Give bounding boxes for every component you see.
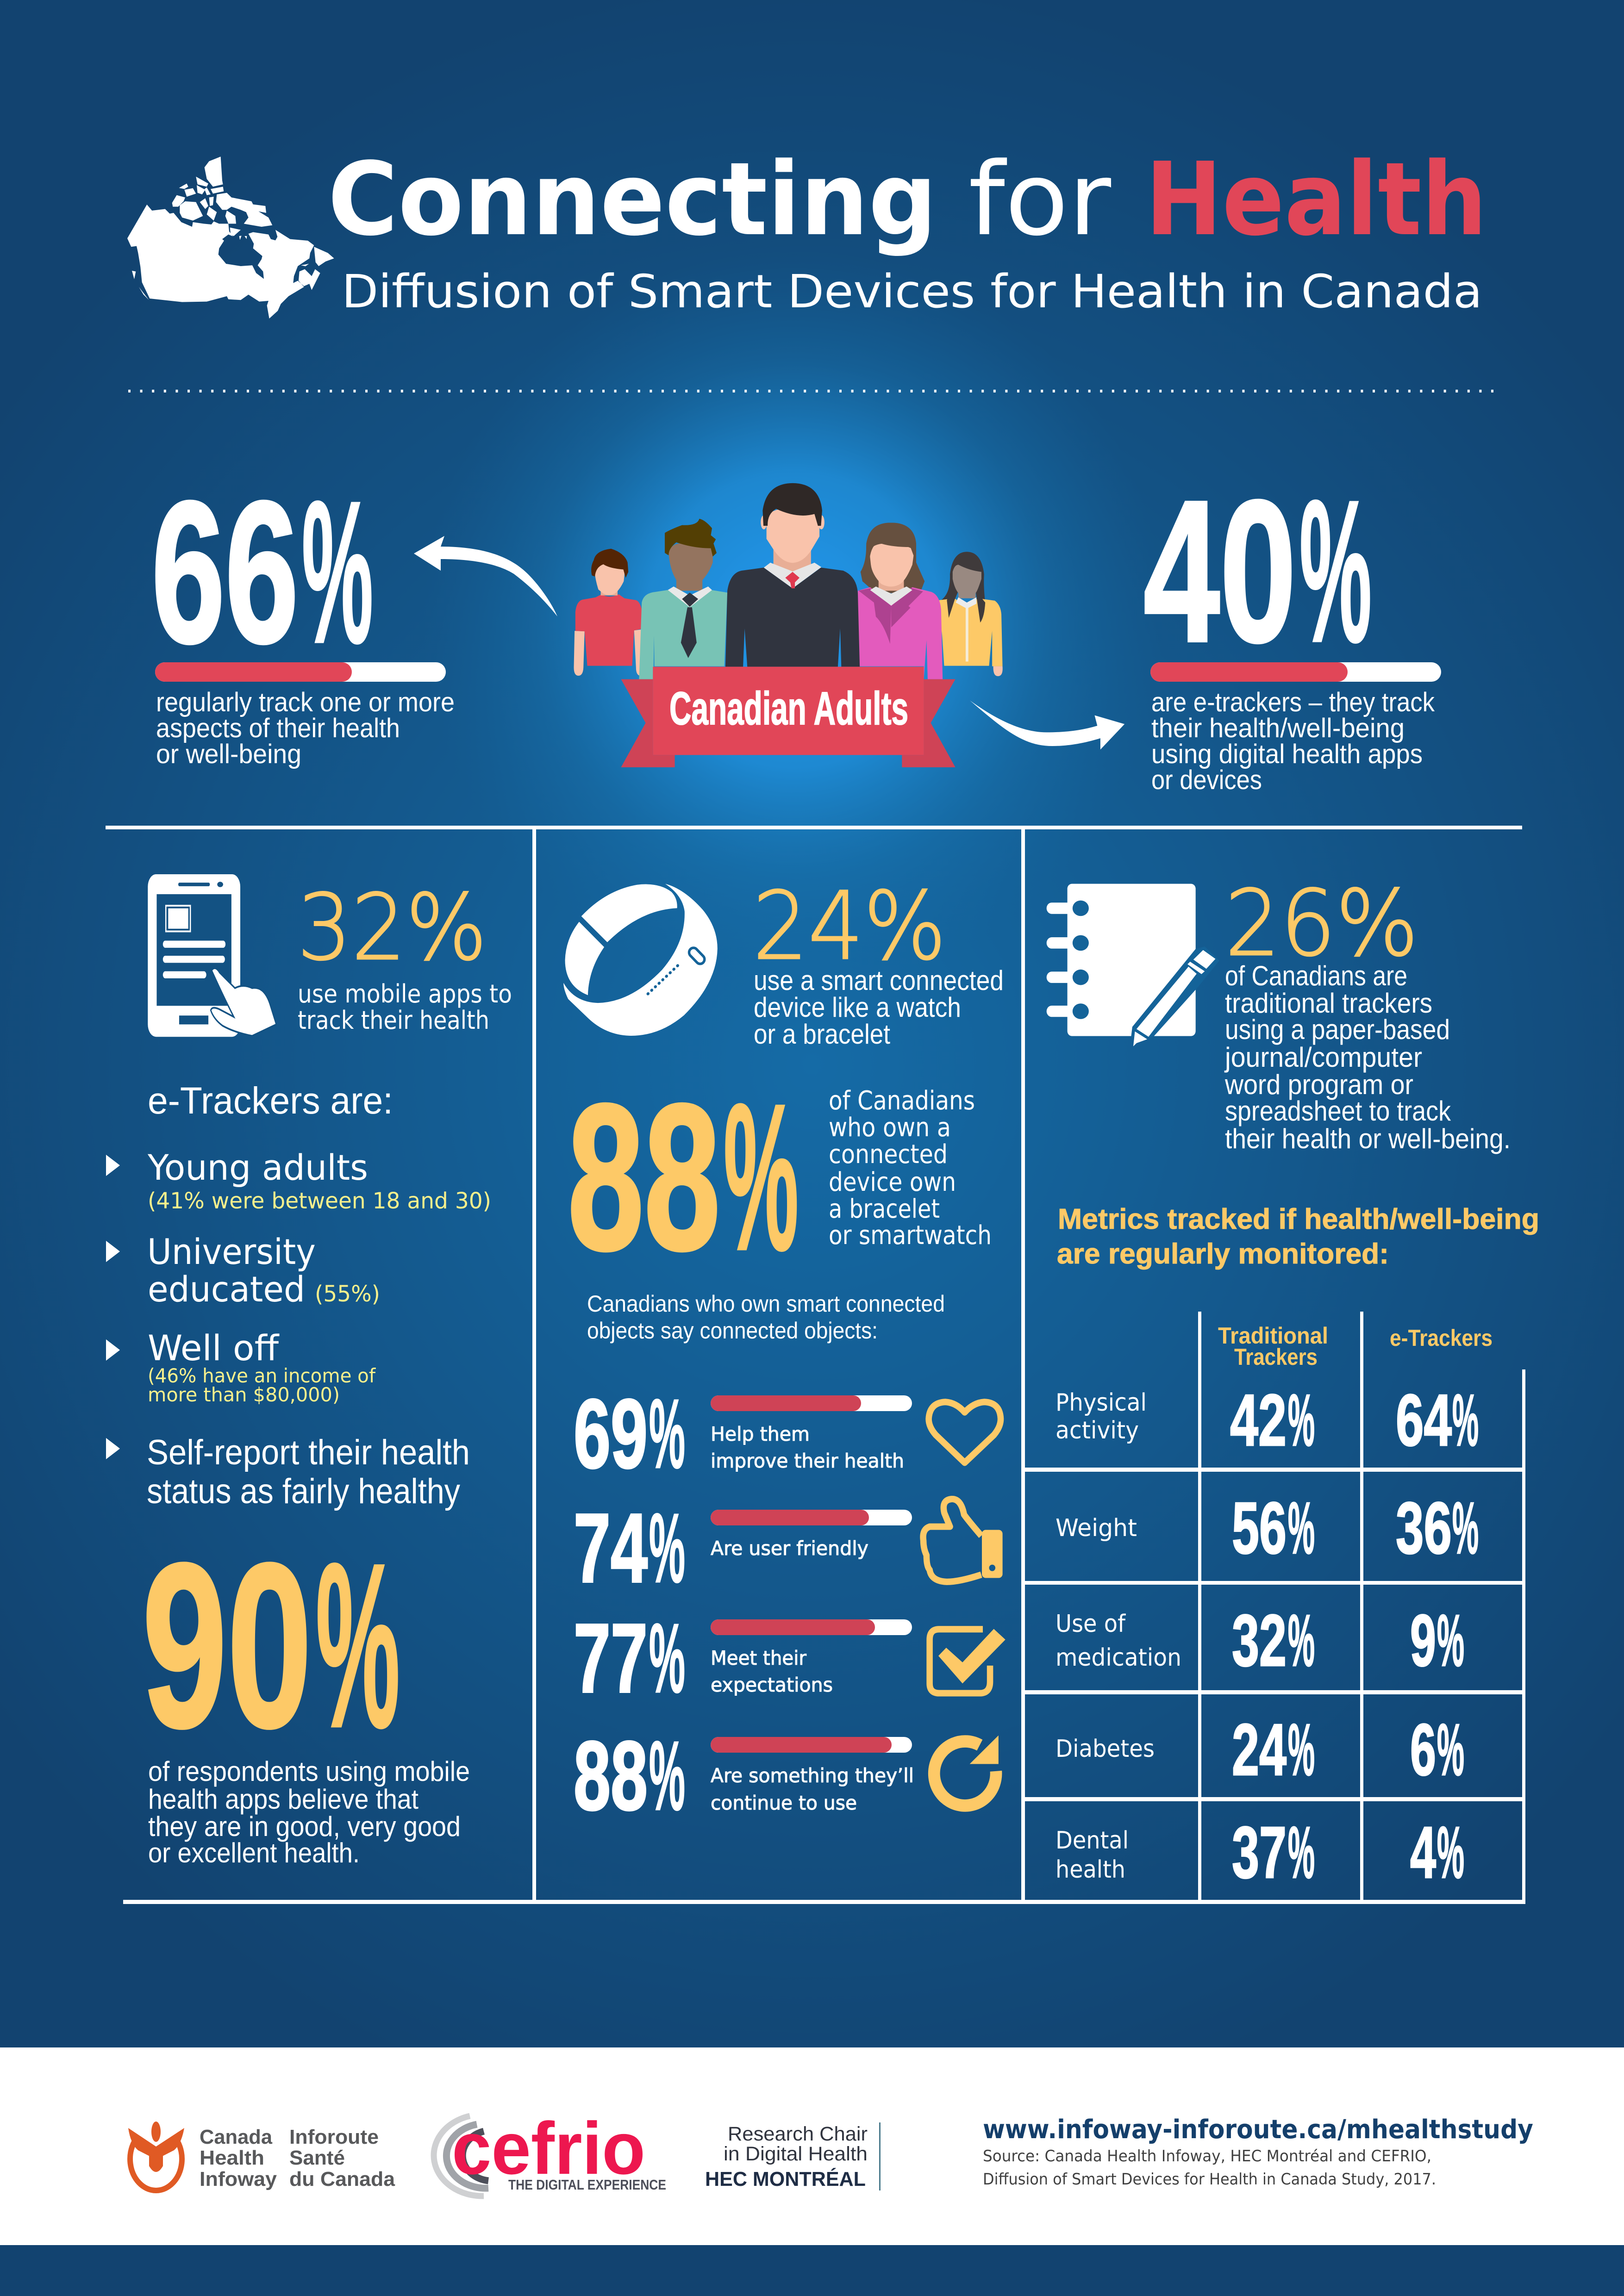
logo: cefrio: cefrio [452,2107,645,2190]
number 40%: 40 [1143,459,1296,684]
stat: 40 percent [1143,459,1441,795]
row: expectations: Meet their [711,1647,807,1669]
row: use of medication: 9 [1410,1600,1436,1681]
stat 32%: 32% [297,875,487,981]
logo: Canada Health Infoway: Santé [289,2147,345,2169]
row: physical activity: % [1288,1380,1315,1461]
bullet: young adults: (41% were between 18 and 30) [148,1188,491,1214]
icon: check box [930,1629,1006,1693]
icon: refresh [934,1736,999,1805]
person: yellow jacket woman [939,552,1003,676]
icon: phone [148,874,276,1037]
row: improve health: Help them [711,1423,810,1445]
text: regularly track one or more [156,687,455,717]
text: or devices [1151,765,1262,795]
person: central man [725,483,860,667]
bullet: well off: Well off [148,1327,280,1369]
stat text: of Canadians are [1225,960,1407,991]
bullet: university educated: University [147,1231,316,1272]
row: use of medication: % [1288,1600,1315,1681]
stat text: track their health [298,1006,489,1035]
row: improve health: improve their health [711,1450,904,1472]
title [328,141,1487,258]
bullet: well off [106,1327,376,1406]
row: use of medication: 32 [1232,1600,1287,1681]
bullet list [106,1147,491,1511]
person: red shirt boy [574,549,645,676]
row: diabetes: % [1288,1709,1315,1791]
grid lines [106,826,1525,1904]
bullet: young adults [106,1147,491,1214]
row: user friendly: 74 [574,1493,648,1603]
text: are e-trackers – they track [1151,687,1435,717]
row: dental health: 37 [1232,1812,1287,1893]
row: expectations: expectations [711,1674,833,1696]
stat 26%: 26% [1225,871,1418,977]
bullet: self-report: status as fairly healthy [147,1472,460,1511]
bullet: young adults: Young adults [147,1147,368,1188]
logo: Canada Health Infoway: Inforoute [289,2126,379,2148]
row: continue to use: % [649,1721,685,1830]
panel: traditional trackers [1047,871,1539,1893]
text: they are in good, very good [148,1811,461,1842]
row: diabetes: 24 [1232,1709,1287,1791]
row: improve health: 69 [574,1379,648,1488]
row: dental health: Dental [1056,1827,1129,1854]
row: continue to use: continue to use [711,1792,857,1814]
number 66%: 66 [151,460,299,685]
text: or smartwatch [829,1220,992,1251]
text: who own a [829,1113,951,1143]
column headers: Trackers [1234,1344,1318,1370]
arrow to 66 percent [414,536,557,616]
progress bar 66% [155,662,446,682]
logo: research chair: Research Chair [728,2123,868,2145]
stat text: device like a watch [754,992,961,1023]
heading: metrics [1057,1203,1539,1270]
arrow to 40 percent [970,701,1124,750]
icon: notebook and pencil [1047,884,1219,1046]
row: weight: 36 [1396,1487,1452,1569]
row: dental health: % [1288,1812,1315,1893]
text: connected [829,1139,948,1170]
title: for [968,141,1111,258]
logo mark [128,2122,184,2190]
logo: Canada Health Infoway: du Canada [289,2168,395,2190]
stat text [298,979,512,1035]
row: dental health: health [1056,1856,1125,1884]
stat 88%: 88 [568,1061,720,1294]
logo: research chair: HEC MONTRÉAL [705,2167,866,2190]
row: expectations: % [649,1603,685,1713]
row: weight: Weight [1056,1514,1137,1542]
stat text: journal/computer [1224,1042,1422,1073]
intro text: objects say connected objects: [587,1318,878,1344]
row: improve health: % [649,1379,685,1488]
icon: bracelet [563,884,718,1036]
panel: smart devices [563,871,1006,1830]
text: or well-being [156,739,301,769]
source: Diffusion of Smart Devices for Health in Canada Study, 2017. [983,2170,1436,2189]
logo: Canada Health Infoway: Health [200,2147,264,2169]
row: physical activity: 42 [1230,1380,1287,1461]
bullet: well off: more than $80,000) [148,1383,340,1406]
row: expectations [574,1603,1006,1713]
text: device own [829,1167,956,1197]
heading: metrics: Metrics tracked if health/well-being [1058,1203,1539,1235]
banner label: Canadian Adults [669,683,908,734]
stat: 66 percent [151,460,455,769]
table: metrics: % [1452,1380,1479,1461]
text: a bracelet [829,1194,940,1224]
source: www.infoway-inforoute.ca/mhealthstudy [983,2115,1533,2145]
text: health apps believe that [148,1784,418,1815]
table: metrics: % [1437,1600,1464,1681]
stat text [1224,960,1511,1154]
text: of Canadians [829,1086,975,1116]
row: user friendly: Are user friendly [711,1537,868,1560]
logo arcs [434,2116,488,2196]
text: or excellent health. [148,1837,360,1868]
row: continue to use [574,1721,999,1830]
row: weight [1056,1487,1479,1569]
footer band [0,2047,1624,2245]
heading: e-Trackers are: [148,1080,393,1122]
text [1151,687,1435,795]
table: metrics: % [1437,1709,1464,1791]
logo: research chair: in Digital Health [724,2143,868,2165]
icon: map of Canada [127,156,334,318]
row: weight: 56 [1232,1487,1287,1569]
text: using digital health apps [1151,739,1423,769]
heading: metrics: are regularly monitored: [1057,1238,1389,1270]
panel: smart devices: % [724,1061,799,1294]
row: use of medication: Use of [1056,1610,1126,1638]
title: Health [1145,141,1487,258]
row: weight: % [1288,1487,1315,1569]
bullet: well off: (46% have an income of [148,1364,376,1387]
text [148,1756,470,1868]
panel: e-trackers [106,874,512,1868]
row: diabetes: Diabetes [1056,1735,1155,1763]
bullet: university educated: (55%) [315,1281,380,1307]
stat 90%: 90 [142,1515,312,1776]
stat text: using a paper-based [1225,1014,1450,1045]
bullet: self-report [106,1433,470,1511]
banner [621,667,956,767]
table: metrics: % [1437,1812,1464,1893]
text [829,1086,992,1251]
source: Source: Canada Health Infoway, HEC Montréal and CEFRIO, [983,2147,1431,2165]
intro text [587,1291,945,1344]
row: dental health [1056,1812,1464,1893]
stat text: use a smart connected [754,965,1004,996]
stat text [754,965,1004,1050]
text: of respondents using mobile [148,1756,470,1787]
row: user friendly [574,1493,1003,1603]
column headers: e-Trackers [1390,1325,1493,1351]
intro text: Canadians who own smart connected [587,1291,945,1317]
table: metrics [1056,1323,1493,1893]
logo: Canada Health Infoway: Canada [200,2126,273,2148]
logo: research chair [705,2122,881,2190]
title: Connecting [328,141,937,258]
stat text: or a bracelet [754,1019,890,1050]
text [156,687,455,769]
row: diabetes: 6 [1410,1709,1436,1791]
row: physical activity: Physical [1056,1389,1147,1417]
stat text: word program or [1224,1069,1413,1100]
progress bar 40% [1150,662,1441,682]
logo: Canada Health Infoway: Infoway [200,2168,277,2190]
row: physical activity [1056,1380,1479,1461]
stat: 40 percent: % [1299,459,1372,684]
stat text: traditional trackers [1225,988,1432,1019]
illustration: Canadian adults [574,483,1124,767]
row: continue to use: 88 [574,1721,648,1830]
panel: e-trackers: % [316,1515,400,1776]
row: use of medication: medication [1056,1644,1181,1672]
table: metrics: % [1452,1487,1479,1569]
person: pink jacket woman [858,523,943,679]
row: expectations: 77 [574,1603,648,1713]
stat 24%: 24% [753,871,946,981]
text: aspects of their health [156,713,400,743]
stat text: their health or well-being. [1225,1123,1511,1154]
bullet: university educated [106,1231,380,1310]
stat: 66 percent: % [302,460,373,685]
row: use of medication [1056,1600,1464,1681]
stat text: spreadsheet to track [1225,1095,1451,1126]
icon: heart [929,1402,1001,1462]
row: user friendly: % [649,1493,685,1603]
row: physical activity: 64 [1396,1380,1452,1461]
source [983,2115,1533,2189]
column headers [1218,1323,1493,1370]
row: dental health: 4 [1410,1812,1436,1893]
row: physical activity: activity [1056,1417,1139,1444]
person: teal shirt man [639,519,727,679]
bullet: university educated: educated [148,1269,305,1310]
row: continue to use: Are something they’ll [711,1764,914,1787]
bullet: self-report: Self-report their health [147,1433,470,1472]
row: diabetes [1056,1709,1464,1791]
text: their health/well-being [1151,713,1405,743]
column headers: Traditional [1218,1323,1328,1349]
row: improve health [574,1379,1001,1488]
subtitle: Diffusion of Smart Devices for Health in Canada [342,265,1482,318]
stat text: use mobile apps to [298,979,512,1008]
logo: cefrio: THE DIGITAL EXPERIENCE [508,2177,666,2193]
logo: Canada Health Infoway [128,2122,395,2190]
icon: thumbs up [923,1499,1003,1582]
